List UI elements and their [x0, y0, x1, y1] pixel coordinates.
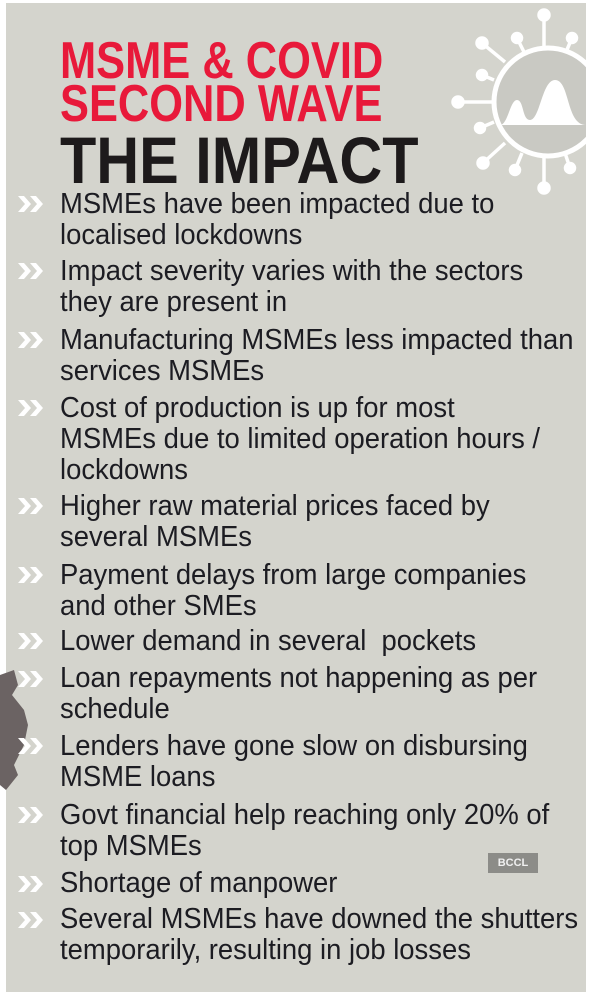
- bullet list: and other SMEs: [60, 590, 257, 622]
- bullet list: MSME loans: [60, 761, 215, 793]
- bullet list: Lenders have gone slow on disbursing: [60, 730, 528, 762]
- title: THE IMPACT: [60, 123, 419, 197]
- bullet list: Payment delays from large companies: [60, 559, 526, 591]
- bullet list: temporarily, resulting in job losses: [60, 934, 471, 966]
- bullet list: Manufacturing MSMEs less impacted than: [60, 324, 574, 356]
- icon: virus with wave: [451, 8, 586, 195]
- bullet list: services MSMEs: [60, 355, 264, 387]
- bullet list: Higher raw material prices faced by: [60, 490, 490, 522]
- credit: BCCL: BCCL: [498, 857, 528, 869]
- bullet list: Shortage of manpower: [60, 867, 337, 899]
- bullet list: Several MSMEs have downed the shutters: [60, 903, 578, 935]
- credit: BCCL: [488, 853, 538, 873]
- bullet list: Loan repayments not happening as per: [60, 662, 537, 694]
- bullet list: Lower demand in several pockets: [60, 625, 476, 657]
- bullet list: they are present in: [60, 286, 287, 318]
- bullet icons: [18, 196, 43, 928]
- bullet list: Govt financial help reaching only 20% of: [60, 799, 549, 831]
- bullet list: Impact severity varies with the sectors: [60, 255, 523, 287]
- bullet list: schedule: [60, 693, 170, 725]
- bullet list: localised lockdowns: [60, 219, 302, 251]
- bullet list: Cost of production is up for most: [60, 392, 455, 424]
- bullet list: MSMEs have been impacted due to: [60, 188, 494, 220]
- bullet list: top MSMEs: [60, 830, 202, 862]
- icon: gear: [0, 670, 28, 790]
- bullet list: lockdowns: [60, 454, 188, 486]
- title: MSME & COVID: [60, 32, 383, 90]
- title: [60, 32, 419, 197]
- title: SECOND WAVE: [60, 75, 382, 133]
- bullet list: [60, 188, 578, 966]
- bullet list: several MSMEs: [60, 521, 252, 553]
- bullet list: MSMEs due to limited operation hours /: [60, 423, 540, 455]
